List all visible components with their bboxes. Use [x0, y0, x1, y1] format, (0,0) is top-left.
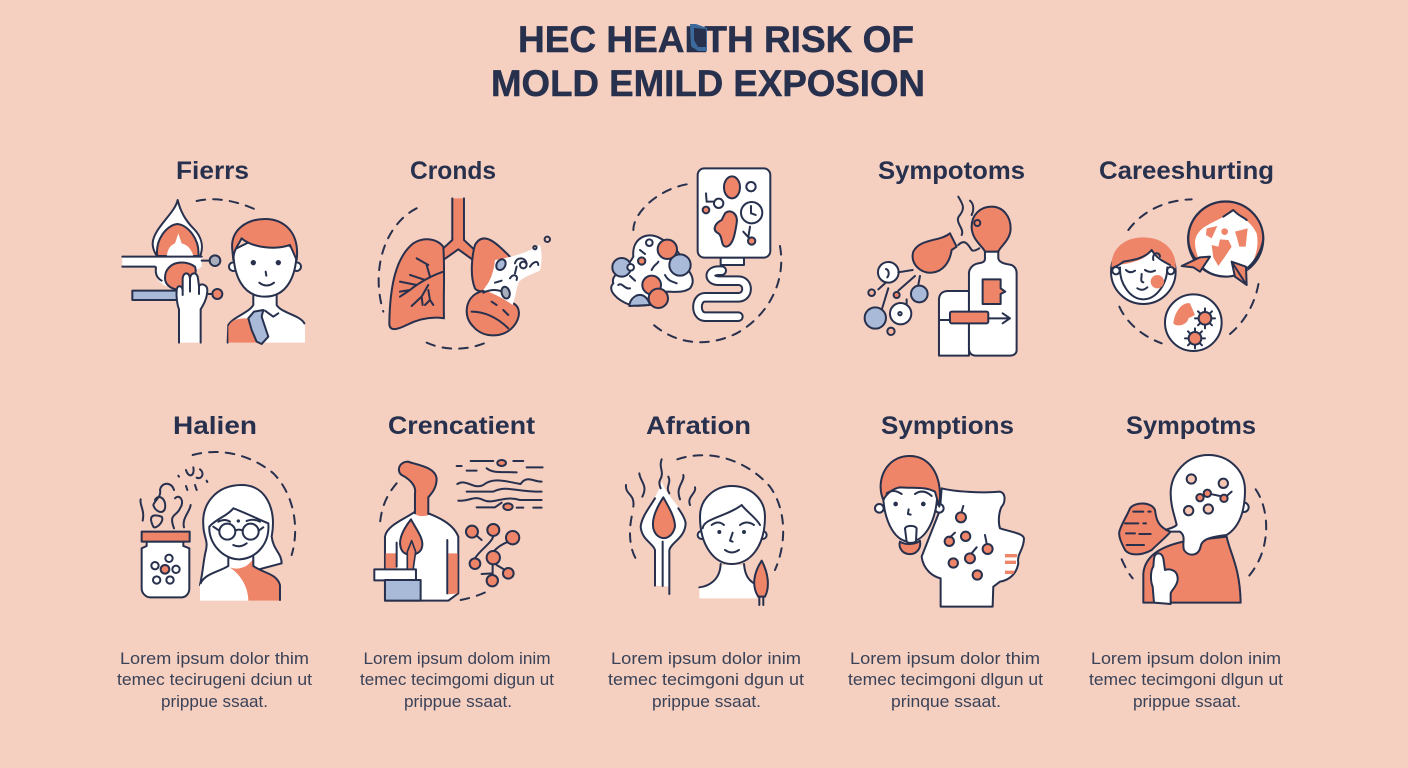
description: Halien — [117, 650, 312, 711]
heading: Sympotoms: Sympotoms — [878, 157, 1025, 185]
panel: Crencatient — [360, 412, 554, 711]
heading: Careeshurting: Careeshurting — [1099, 157, 1274, 185]
description: Crencatient: prippue ssaat. — [404, 693, 512, 711]
heading: Cronds: Cronds — [410, 157, 496, 185]
description: Symptions: Lorem ipsum dolor thim — [850, 650, 1040, 668]
panel: Symptions — [848, 412, 1043, 711]
description: Afration: temec tecimgoni dgun ut — [608, 671, 804, 689]
title — [491, 19, 925, 104]
icon: card, spore cloud and tube — [611, 168, 781, 342]
panel: digestive (no heading) — [611, 168, 781, 342]
heading: Symptions: Symptions — [881, 412, 1014, 440]
icon: lungs with spores — [379, 198, 550, 349]
heading: Fierrs: Fierrs — [176, 157, 249, 185]
description: Symptions — [848, 650, 1043, 711]
description: Sympotms: temec tecimgoni dlgun ut — [1089, 671, 1283, 689]
description: Sympotms: prippue ssaat. — [1133, 693, 1241, 711]
panel: Cronds — [379, 157, 550, 349]
panel: Fierrs — [122, 157, 305, 344]
heading: Sympotms: Sympotms — [1126, 412, 1256, 440]
panel: Sympotoms — [865, 157, 1025, 356]
heading: Afration: Afration — [646, 412, 751, 440]
heading: Crencatient: Crencatient — [388, 412, 536, 440]
title: MOLD EMILD EXPOSION — [491, 63, 925, 104]
panel: Sympotms — [1089, 412, 1283, 711]
description: Sympotms — [1089, 650, 1283, 711]
title: HEC HEALTH RISK OF — [518, 19, 914, 60]
description: Symptions: temec tecimgoni dlgun ut — [848, 671, 1043, 689]
panel: Careeshurting — [1099, 157, 1274, 351]
description: Symptions: prinque ssaat. — [891, 693, 1001, 711]
icon: boy with rash on torso — [875, 456, 1024, 607]
description: Afration: Lorem ipsum dolor inim — [611, 650, 801, 668]
icon: bulb, bottle and particles — [865, 197, 1017, 356]
description: Sympotms: Lorem ipsum dolon inim — [1091, 650, 1281, 668]
icon: flame torch and person — [626, 455, 783, 605]
description: Halien: temec tecirugeni dciun ut — [117, 671, 312, 689]
icon: face, spores and virus circles — [1111, 199, 1263, 351]
icon: flame, hand and person — [122, 199, 305, 344]
panel: Halien — [117, 412, 312, 711]
description: Crencatient — [360, 650, 554, 711]
icon: steaming jar and woman — [140, 452, 295, 601]
description: Halien: Lorem ipsum dolor thim — [120, 650, 309, 668]
description: Halien: prippue ssaat. — [161, 693, 268, 711]
heading: Halien: Halien — [173, 412, 257, 440]
panel: Afration — [608, 412, 804, 711]
icon: person with flame and network — [374, 460, 543, 601]
icon: head with spots and speech blob — [1119, 455, 1266, 604]
description: Crencatient: temec tecimgomi digun ut — [360, 671, 554, 689]
description: Crencatient: Lorem ipsum dolom inim — [364, 650, 550, 668]
description: Afration: prippue ssaat. — [652, 693, 761, 711]
description: Afration — [608, 650, 804, 711]
